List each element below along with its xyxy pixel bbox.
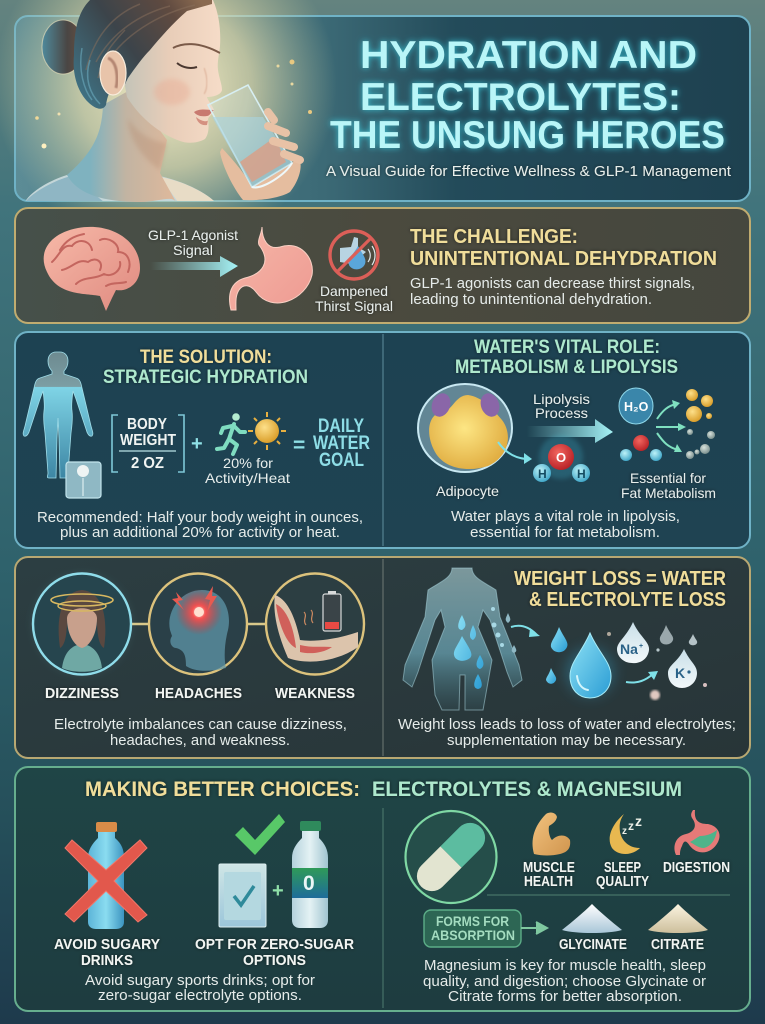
label: avoid sugary drinks: AVOID SUGARY <box>54 937 160 953</box>
icon: digestion <box>674 810 720 855</box>
heading: the challenge: THE CHALLENGE: <box>410 225 578 248</box>
arrow: signal <box>150 256 238 277</box>
icon: sleep quality: z <box>622 826 627 837</box>
heading: water's vital role <box>455 337 678 378</box>
icon: electrolyte sachet <box>219 864 266 927</box>
text: weight loss description <box>398 716 736 749</box>
text: magnesium description: Citrate forms for better absorption. <box>448 988 682 1005</box>
label: opt for zero-sugar options <box>195 937 354 969</box>
label: lipolysis process: Process <box>535 405 588 421</box>
badge: forms for absorption: ABSORPTION <box>431 927 515 943</box>
heading: the challenge <box>410 225 717 270</box>
text: weight loss description: Weight loss leads to loss of water and electrolytes; <box>398 716 736 733</box>
formula: daily water goal <box>112 412 370 486</box>
text: magnesium description <box>423 957 706 1005</box>
heading: water's vital role: METABOLISM & LIPOLYSIS <box>455 357 678 378</box>
heading: the challenge: UNINTENTIONAL DEHYDRATION <box>410 247 717 270</box>
formula: daily water goal: BODY <box>127 416 168 433</box>
icon: brain <box>44 227 140 311</box>
labels: symptoms: DIZZINESS <box>45 686 119 702</box>
illustration: water and electrolyte droplets: K <box>675 665 685 681</box>
heading: making better choices: ELECTROLYTES & MAGNESIUM <box>372 778 682 801</box>
heading: weight loss: WEIGHT LOSS = WATER <box>514 568 726 590</box>
formula: daily water goal: = <box>293 434 305 457</box>
formula: daily water goal: + <box>191 433 203 455</box>
text: water role description: Water plays a vital role in lipolysis, <box>451 508 680 525</box>
heading: the solution <box>103 347 308 388</box>
text: symptoms description <box>54 716 347 749</box>
arrow: to forms <box>521 922 547 934</box>
icon: dizziness <box>33 574 131 674</box>
illustration: water and electrolyte droplets <box>511 622 707 700</box>
icon: plus: + <box>272 880 284 902</box>
labels: magnesium benefits: SLEEP <box>604 860 641 876</box>
icon: magnesium capsule <box>406 811 496 903</box>
heading: making better choices: MAKING BETTER CHOICES: <box>85 778 360 801</box>
text: solution description <box>37 509 363 541</box>
icon: runner <box>217 413 245 454</box>
icon: scale <box>66 462 101 498</box>
heading: making better choices <box>85 778 682 801</box>
label: lipolysis process <box>533 391 590 421</box>
label: essential for fat metabolism: Essential for <box>630 470 706 486</box>
label: essential for fat metabolism: Fat Metabolism <box>621 485 716 501</box>
label: opt for zero-sugar options: OPT FOR ZERO-SUGAR <box>195 937 354 953</box>
labels: magnesium benefits: HEALTH <box>524 874 573 890</box>
formula: daily water goal: DAILY <box>318 416 364 437</box>
text: symptoms description: headaches, and weakness. <box>110 732 290 749</box>
labels: symptoms: WEAKNESS <box>275 686 355 702</box>
text: drinks description: Avoid sugary sports drinks; opt for <box>85 972 315 989</box>
text: drinks description: zero-sugar electrolyte options. <box>98 987 302 1004</box>
illustration: body silhouette with droplets <box>403 568 522 710</box>
title: ELECTROLYTES: <box>360 76 681 119</box>
labels: magnesium benefits: QUALITY <box>596 874 649 890</box>
icon: zero sugar bottle: 0 <box>303 872 315 895</box>
icon: dampened thirst signal <box>330 231 378 279</box>
label: essential for fat metabolism <box>621 470 716 501</box>
icon: water molecule: O <box>556 450 566 465</box>
icon: citrate powder <box>648 904 708 933</box>
formula: daily water goal: GOAL <box>319 450 364 471</box>
label: dampened thirst signal: Dampened <box>320 283 388 299</box>
icon: adipocyte cell <box>418 384 532 472</box>
subtitle: A Visual Guide for Effective Wellness & GLP-1 Management <box>326 163 732 180</box>
formula: daily water goal: 2 OZ <box>131 455 165 472</box>
text: solution description: plus an additional 20% for activity or heat. <box>60 524 340 541</box>
text: magnesium description: Magnesium is key for muscle health, sleep <box>424 957 706 974</box>
formula: daily water goal: WEIGHT <box>120 432 176 449</box>
heading: water's vital role: WATER'S VITAL ROLE: <box>474 337 660 358</box>
text: challenge description: GLP-1 agonists can decrease thirst signals, <box>410 275 695 292</box>
icon: water molecule: H <box>538 467 547 481</box>
icon: green check <box>235 814 285 855</box>
labels: magnesium benefits: DIGESTION <box>663 860 730 876</box>
icon: zero sugar bottle <box>292 821 328 928</box>
icon: sleep quality: z <box>635 813 642 829</box>
title <box>330 34 725 157</box>
icon: weakness <box>266 574 364 674</box>
label: opt for zero-sugar options: OPTIONS <box>243 953 306 969</box>
text: challenge description <box>410 275 695 308</box>
label: GLP-1 agonist signal: GLP-1 Agonist <box>148 227 238 243</box>
heading: the solution: STRATEGIC HYDRATION <box>103 367 308 388</box>
labels: forms: GLYCINATE <box>559 937 627 953</box>
label: avoid sugary drinks <box>54 937 160 969</box>
heading: weight loss: & ELECTROLYTE LOSS <box>529 589 726 611</box>
text: drinks description <box>85 972 315 1004</box>
text: weight loss description: supplementation may be necessary. <box>447 732 686 749</box>
badge: forms for absorption: FORMS FOR <box>436 913 509 929</box>
panel: making better choices <box>15 767 750 1011</box>
heading: weight loss <box>514 568 726 611</box>
labels: forms: CITRATE <box>651 937 704 953</box>
icon: body water level <box>23 352 93 478</box>
icon: water molecule <box>533 435 590 482</box>
formula: daily water goal: Activity/Heat <box>205 470 290 486</box>
connectors <box>132 623 266 625</box>
icon: sleep quality: z <box>628 819 634 833</box>
icon: water molecule: H <box>577 467 586 481</box>
icon: muscle health <box>532 813 570 856</box>
label: adipocyte: Adipocyte <box>436 483 499 499</box>
text: solution description: Recommended: Half your body weight in ounces, <box>37 509 363 526</box>
panel: solution and water role <box>15 332 750 548</box>
panel: the challenge <box>15 208 750 323</box>
heading: the solution: THE SOLUTION: <box>140 347 272 368</box>
title: THE UNSUNG HEROES <box>330 114 725 157</box>
icon: H2O bubble and fat products <box>619 388 715 461</box>
label: GLP-1 agonist signal <box>148 227 238 258</box>
text: challenge description: leading to unintentional dehydration. <box>410 291 652 308</box>
labels: magnesium benefits: MUSCLE <box>523 860 575 876</box>
title: HYDRATION AND <box>360 34 697 77</box>
icon: glycinate powder <box>562 904 622 933</box>
icon: sun <box>248 412 286 450</box>
formula: daily water goal: WATER <box>313 433 370 454</box>
icon: stomach <box>230 227 312 310</box>
text: water role description <box>451 508 680 541</box>
text: magnesium description: quality, and digestion; choose Glycinate or <box>423 973 706 990</box>
badge: forms for absorption <box>424 910 521 947</box>
label: dampened thirst signal <box>315 283 393 314</box>
icon: sleep quality <box>610 813 642 854</box>
illustration: woman drinking water <box>1 0 330 207</box>
label: avoid sugary drinks: DRINKS <box>81 953 133 969</box>
text: symptoms description: Electrolyte imbalances can cause dizziness, <box>54 716 347 733</box>
illustration: water and electrolyte droplets: + <box>639 643 643 650</box>
label: lipolysis process: Lipolysis <box>533 391 590 407</box>
illustration: water and electrolyte droplets: Na <box>620 641 638 657</box>
labels: symptoms <box>45 686 355 702</box>
labels: forms <box>559 937 704 953</box>
labels: symptoms: HEADACHES <box>155 686 242 702</box>
arrow: lipolysis <box>527 419 613 443</box>
label: dampened thirst signal: Thirst Signal <box>315 298 393 314</box>
icon: sugary drink crossed out <box>65 822 147 929</box>
labels: magnesium benefits <box>523 860 730 890</box>
icon: H2O bubble and fat products: H₂O <box>624 400 649 414</box>
label: GLP-1 agonist signal: Signal <box>173 242 213 258</box>
panel: symptoms and weight loss <box>15 557 750 758</box>
icon: headaches <box>149 574 247 674</box>
text: water role description: essential for fat metabolism. <box>470 524 660 541</box>
panel: header <box>1 0 751 207</box>
formula: daily water goal: 20% for <box>223 455 273 471</box>
